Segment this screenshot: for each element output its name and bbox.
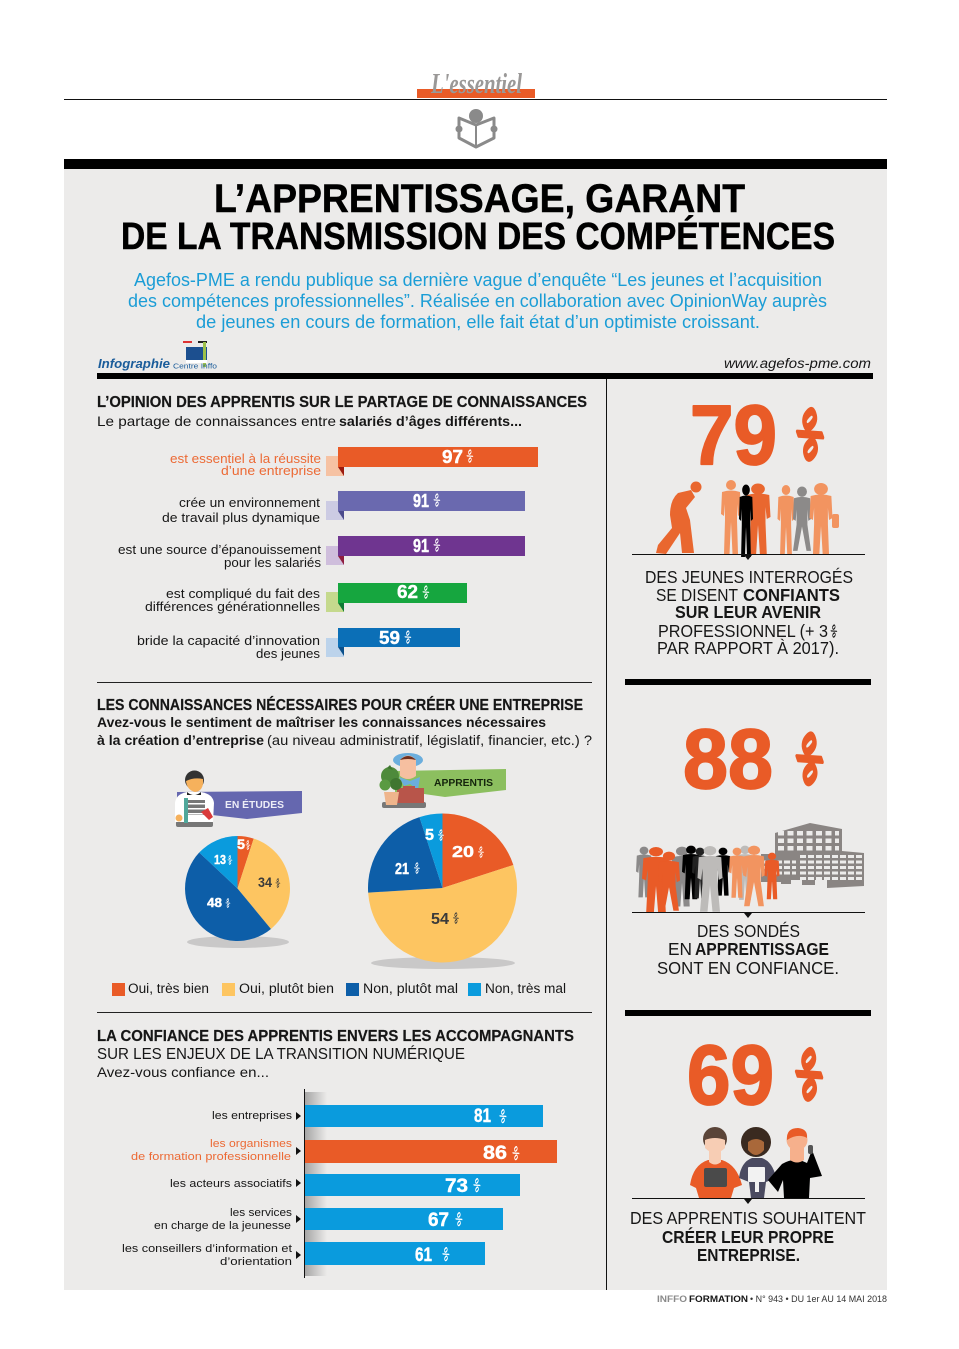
section heading: Le partage de connaissances entre [97,413,336,429]
bar: conseillers 61 %: % [440,1244,452,1265]
section heading: salariés d’âges différents... [339,413,522,429]
big number 69 %: 69 [687,1028,774,1122]
pie: en études: 5 [237,837,246,852]
footer [657,1294,887,1305]
credit: infographie centre inffo: Centre Inffo [173,362,217,370]
pie: apprentis: % [436,828,445,844]
big number 88 % [683,712,831,806]
section heading: Avez-vous le sentiment de maîtriser les connaissances nécessaires [97,714,546,730]
icon: reader with open book [456,109,498,147]
section heading [97,1028,574,1080]
stat text: APPRENTISSAGE [695,939,829,959]
bar: les entreprises 81 %: 81 [474,1106,491,1127]
panel: opinion des apprentis [97,394,587,661]
pie: en études: % [244,839,252,852]
legend: Oui, très bien [128,981,209,996]
section heading: LES CONNAISSANCES NÉCESSAIRES POUR CRÉER UNE ENTREPRISE [97,697,583,714]
website url: www.agefos-pme.com [724,356,871,371]
legend [112,981,566,996]
icon: three young people [690,1127,822,1198]
section heading [97,394,587,429]
bar: services jeunesse 67 %: % [453,1209,465,1230]
column separators [97,373,873,1290]
stat text [657,921,839,978]
banner: en études [177,791,302,819]
baseline with pointer [632,912,865,918]
stat text: % [828,623,839,641]
credit: infographie centre inffo: Infographie [98,356,170,371]
banner: en études: EN ÉTUDES [225,798,284,811]
section heading: Avez-vous confiance en... [97,1064,269,1080]
bar: 59 %: % [402,629,413,647]
section heading: SUR LES ENJEUX DE LA TRANSITION NUMÉRIQUE [97,1046,465,1063]
bar: 97 %: est essentiel à la réussite [170,451,321,466]
bar: organismes de formation 86 %: 86 [483,1143,507,1164]
stat text: PROFESSIONNEL (+ 3 [658,621,828,641]
bar: services jeunesse 67 %: les services [230,1207,293,1219]
baseline with pointer [632,1198,865,1204]
stat text [645,567,853,658]
legend: Oui, plutôt bien [239,981,334,996]
panel: connaissances pour créer une entreprise [97,697,592,996]
bar: 97 %: 97 [442,447,463,467]
title: L’APPRENTISSAGE, GARANT [214,177,745,221]
banner: apprentis [395,769,506,797]
big number 79 %: % [788,399,831,471]
person with phone [768,1128,822,1198]
stat text: EN [668,939,692,959]
bar: 59 %: 59 [379,628,400,648]
pie: apprentis: % [451,911,460,927]
section heading: à la création d’entreprise [97,732,264,748]
baseline with pointer [632,554,865,560]
bar: organismes de formation 86 %: de formation professionnelle [131,1151,291,1163]
bar: 97 %: % [464,448,475,466]
stat text: ENTREPRISE. [697,1245,800,1265]
stat text: CRÉER LEUR PROPRE [662,1226,834,1247]
big number 79 % [690,388,831,482]
person with tablet [690,1127,742,1198]
bar: 91 % environnement: % [431,492,442,510]
bar: 91 % environnement [162,491,525,525]
person with paper [739,1127,776,1198]
footer: INFFO [657,1294,687,1305]
stat text [630,1208,866,1265]
icon: student [175,770,214,827]
stat text: DES APPRENTIS SOUHAITENT [630,1208,866,1228]
pie: en études: 13 [214,853,226,867]
banner: apprentis: APPRENTIS [434,777,493,789]
section heading: L’OPINION DES APPRENTIS SUR LE PARTAGE DE CONNAISSANCES [97,394,587,411]
bar: 91 % épanouissement: pour les salariés [224,555,322,570]
pie: en études: 34 [258,875,272,890]
pie: apprentis: 54 [431,911,449,928]
panel: confiance des apprentis [97,1028,574,1278]
bar: 59 % [137,628,460,661]
bar: 91 % épanouissement: 91 [413,536,429,556]
big number 69 %: % [787,1039,830,1111]
intro text [128,270,827,332]
bar: 62 %: différences générationnelles [145,599,321,614]
section heading: (au niveau administratif, législatif, financier, etc.) ? [267,732,592,748]
main panel background [64,159,887,1290]
credit: infographie centre inffo [98,341,217,371]
legend: Non, plutôt mal [363,981,458,996]
bar: les entreprises 81 %: % [497,1106,509,1127]
bar: conseillers 61 %: les conseillers d’information et [122,1243,292,1255]
bar: 91 % environnement: crée un environnement [179,495,320,510]
section heading [97,697,592,748]
page header: l'essentiel: L'essentiel [430,68,523,100]
stat panel: 88 % [632,712,865,978]
pie: apprentis: % [476,845,485,861]
footer: FORMATION [689,1294,748,1305]
bar: 97 %: d’une entreprise [221,463,321,478]
section heading: LA CONFIANCE DES APPRENTIS ENVERS LES ACCOMPAGNANTS [97,1028,574,1045]
bar: les entreprises 81 % [212,1105,543,1127]
stat text: CONFIANTS [743,585,840,605]
bar: services jeunesse 67 %: en charge de la jeunesse [154,1220,291,1232]
stat text: SONT EN CONFIANCE. [657,958,839,978]
icon: silhouettes of young people [656,480,839,557]
bar: les entreprises 81 %: les entreprises [212,1110,293,1122]
bar: organismes de formation 86 %: % [510,1143,522,1164]
legend: Non, très mal [485,981,566,996]
bar: 62 %: 62 [397,582,418,602]
bar: 91 % environnement: 91 [413,491,429,511]
pie: apprentis [368,814,517,969]
bar: 59 %: bride la capacité d’innovation [137,633,320,648]
bar: services jeunesse 67 %: 67 [428,1210,449,1231]
pie: en études: % [274,877,282,890]
title [121,177,835,258]
pie: en études [185,836,290,948]
bar: 59 %: des jeunes [256,646,320,661]
pie: apprentis: 5 [425,827,434,844]
stat text: SUR LEUR AVENIR [675,602,821,622]
bar: 62 %: % [420,584,431,602]
bar: 91 % épanouissement [118,536,525,570]
intro text: de jeunes en cours de formation, elle fait état d’un optimiste croissant. [196,312,760,332]
pie: apprentis: 21 [395,861,409,878]
bar: 62 % [145,582,467,614]
big number 88 %: % [788,723,831,795]
intro text: Agefos-PME a rendu publique sa dernière vague d’enquête “Les jeunes et l’acquisition [134,270,822,290]
big number 79 %: 79 [690,388,777,482]
footer: • N° 943 • DU 1er AU 14 MAI 2018 [750,1294,887,1305]
bar: 91 % épanouissement: % [431,537,442,555]
stat text: SE DISENT [656,585,738,605]
icon: gardener apprentice [380,753,426,808]
big number 69 % [687,1028,830,1122]
bar: conseillers 61 %: 61 [415,1245,432,1266]
pie: en études: 48 [207,896,222,910]
stat text: DES SONDÉS [697,921,800,941]
axis with shadow [304,1089,327,1278]
bar: organismes de formation 86 % [131,1138,557,1164]
bar: acteurs associatifs 73 %: % [471,1175,483,1196]
intro text: des compétences professionnelles”. Réalisée en collaboration avec OpinionWay auprès [128,291,827,311]
bar: acteurs associatifs 73 % [170,1174,520,1197]
stat text: DES JEUNES INTERROGÉS [645,567,853,587]
pie: apprentis: % [412,861,421,877]
stat text: PAR RAPPORT À 2017). [657,638,839,658]
title: DE LA TRANSMISSION DES COMPÉTENCES [121,214,835,258]
bar: acteurs associatifs 73 %: 73 [445,1176,468,1197]
pie: apprentis: 20 [452,844,474,861]
icon: crowd of silhouettes [636,846,780,912]
bar: 62 %: est compliqué du fait des [166,586,321,601]
bar: 91 % épanouissement: est une source d’épanouissement [118,542,321,557]
bar: organismes de formation 86 %: les organismes [210,1138,293,1150]
pie: en études: % [224,897,232,910]
stat panel: 79 % [632,388,865,658]
stat panel: 69 % [630,1028,866,1265]
pie: en études: % [226,854,234,867]
big number 88 %: 88 [683,712,773,806]
bar: conseillers 61 % [122,1242,485,1268]
bar: 91 % environnement: de travail plus dynamique [162,510,320,525]
icon: company building [761,823,864,888]
page header: l'essentiel [64,68,887,100]
bar: 97 % [170,447,538,478]
bar: services jeunesse 67 % [154,1207,503,1232]
bar: acteurs associatifs 73 %: les acteurs associatifs [170,1178,293,1190]
bar: conseillers 61 %: d’orientation [220,1256,292,1268]
